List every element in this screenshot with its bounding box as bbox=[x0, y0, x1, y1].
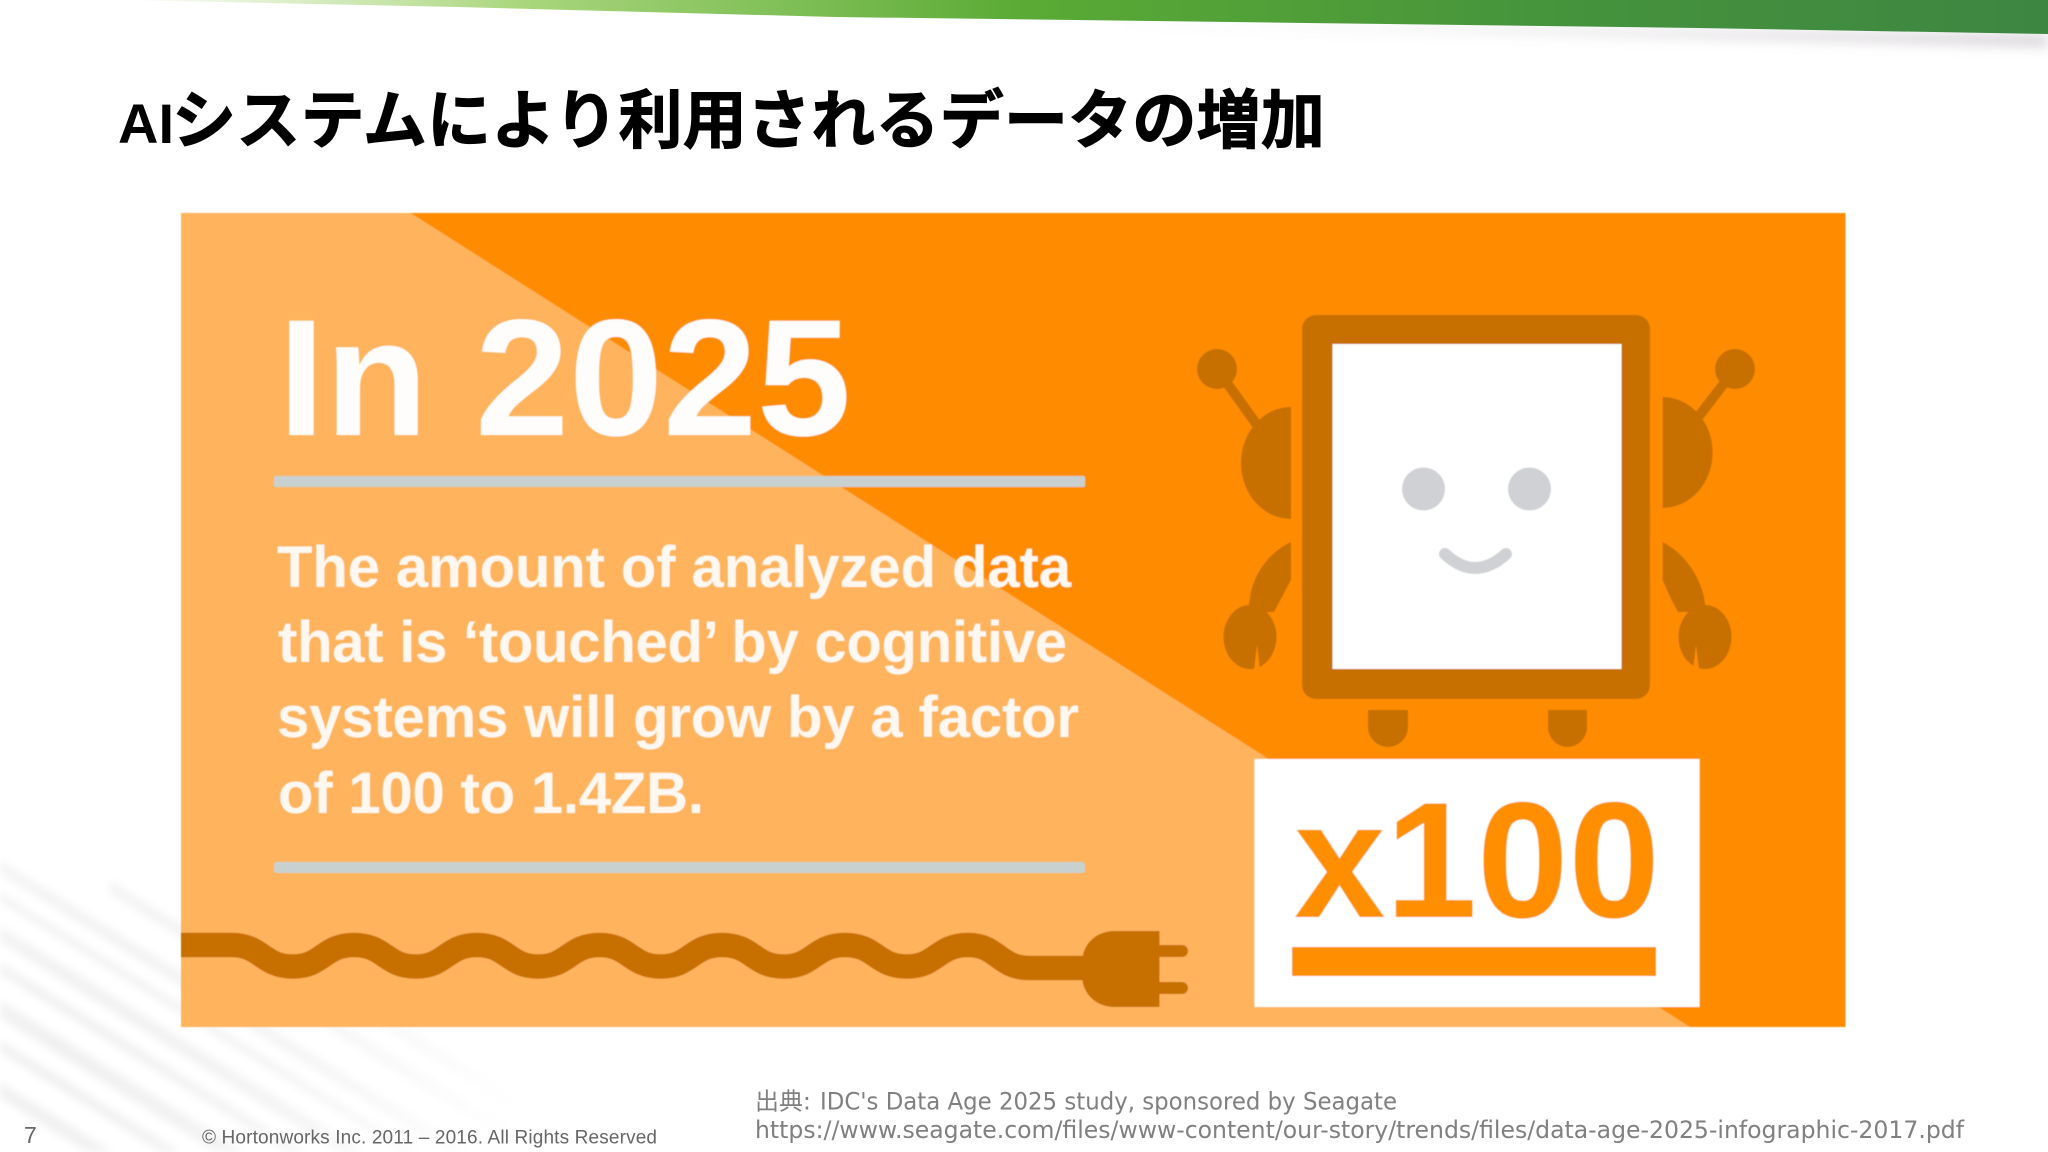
background stripes bbox=[1, 868, 324, 1151]
prongs bbox=[1158, 945, 1188, 994]
robot right antenna and shoulder bbox=[1663, 349, 1755, 508]
panel: infographic image bbox=[181, 213, 1846, 1027]
robot feet bbox=[1368, 710, 1587, 747]
robot screen bbox=[1332, 344, 1622, 669]
robot left antenna and shoulder bbox=[1197, 349, 1291, 519]
heading: In 2025: In 2025 bbox=[278, 286, 851, 471]
robot body frame bbox=[1302, 315, 1650, 699]
robot left claw arm bbox=[1224, 542, 1291, 670]
text block: description: of 100 to 1.4ZB. bbox=[278, 761, 704, 826]
page number: 7 bbox=[24, 1122, 37, 1148]
plug bbox=[1082, 931, 1160, 1007]
robot right claw arm bbox=[1663, 542, 1732, 670]
robot eyes bbox=[1402, 468, 1551, 510]
top green banner bbox=[120, 0, 2048, 46]
callout: x100 bbox=[1254, 759, 1700, 1007]
source citation: IDC's Data Age 2025 study, sponsored by Seagate bbox=[820, 1088, 1397, 1116]
cord bbox=[181, 945, 1085, 968]
divider: lower rule bbox=[274, 862, 1085, 873]
source citation bbox=[755, 1088, 1965, 1144]
title: AI bbox=[118, 92, 174, 155]
source citation: 出典: bbox=[755, 1088, 811, 1116]
robot smile bbox=[1445, 554, 1506, 568]
divider: upper rule bbox=[274, 476, 1085, 487]
icon: power cord and plug bbox=[181, 931, 1188, 1007]
icon: smiling robot bbox=[1197, 315, 1755, 747]
text block: description: that is ‘touched’ by cognitive bbox=[278, 610, 1067, 675]
copyright footer: © Hortonworks Inc. 2011 – 2016. All Rights Reserved bbox=[202, 1128, 657, 1148]
callout: x100: x100 bbox=[1294, 768, 1660, 952]
panel background bbox=[181, 213, 1846, 1027]
source citation: https://www.seagate.com/files/www-content/our-story/trends/files/data-age-2025-infographic-2017.pdf bbox=[755, 1116, 1965, 1144]
text block: description: The amount of analyzed data bbox=[277, 535, 1072, 600]
text block: description: systems will grow by a factor bbox=[277, 685, 1079, 750]
text block: description bbox=[277, 535, 1079, 826]
title: システムにより利用されるデータの増加 bbox=[172, 85, 1325, 157]
